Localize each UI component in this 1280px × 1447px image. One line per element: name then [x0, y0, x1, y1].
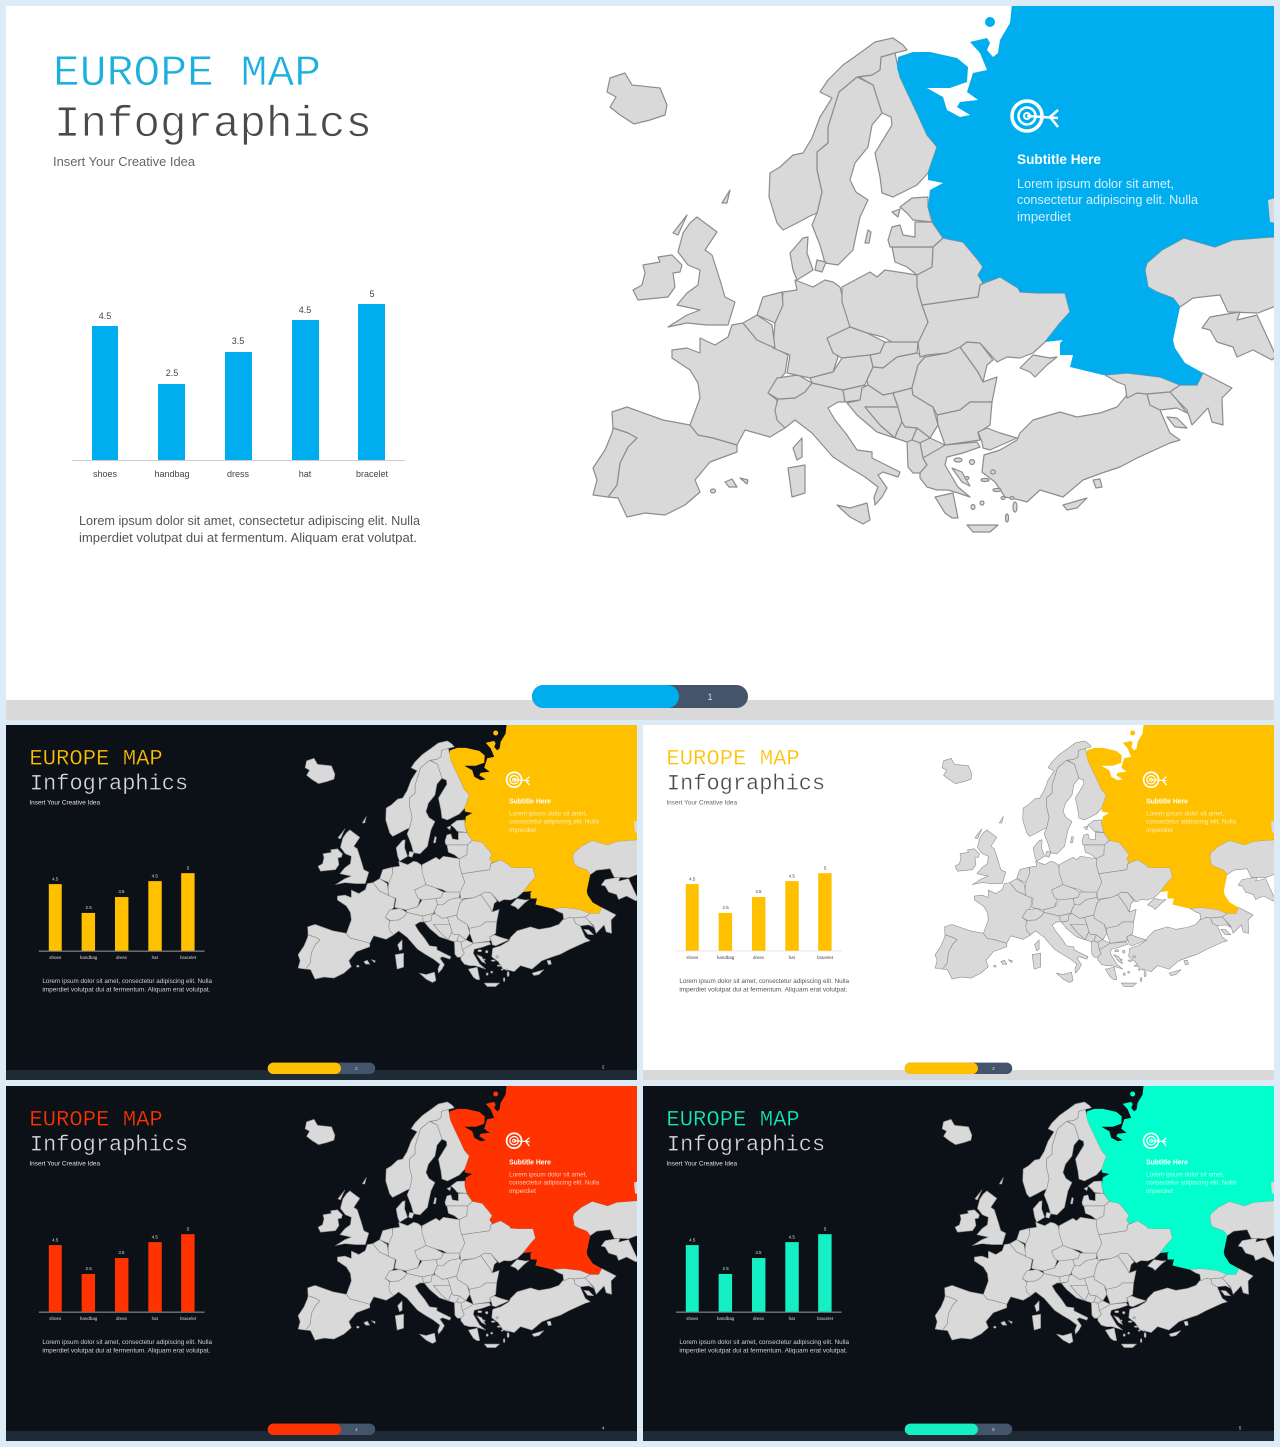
footer band and pager: 5: [992, 1427, 995, 1432]
title: Insert Your Creative Idea: [666, 1161, 737, 1168]
bar chart: 3.5: [118, 1250, 125, 1255]
callout text: Subtitle Here: [1146, 1160, 1188, 1167]
bar chart: 2.5: [722, 1266, 729, 1271]
bar chart: 4.5: [689, 877, 696, 882]
callout text: imperdiet: [1146, 1188, 1173, 1195]
footer band and pager: [6, 1424, 637, 1441]
bar chart: hat: [789, 1316, 796, 1321]
callout text: consectetur adipiscing elit. Nulla: [509, 818, 600, 825]
bar chart: bracelet: [356, 469, 389, 479]
callout text: consectetur adipiscing elit. Nulla: [509, 1179, 600, 1186]
callout text: Subtitle Here: [1017, 151, 1101, 167]
bar chart: 5: [187, 866, 190, 871]
description text: imperdiet volutpat dui at fermentum. Aliquam erat volutpat.: [679, 987, 848, 993]
bar chart: 2.5: [85, 905, 92, 910]
slide 4: red on dark: [6, 1086, 637, 1441]
bar chart: handbag: [717, 1316, 735, 1321]
bar chart: 3.5: [232, 336, 244, 346]
callout text: [1146, 1160, 1237, 1195]
title: [29, 1107, 188, 1168]
slide 3: yellow on white: [643, 725, 1274, 1080]
footer band and pager: 2: [602, 1065, 605, 1070]
bar chart: bracelet: [180, 955, 197, 960]
footer band and pager: [643, 1424, 1274, 1441]
bar chart: bracelet: [817, 955, 834, 960]
bar chart: shoes: [93, 469, 118, 479]
description text: Lorem ipsum dolor sit amet, consectetur adipiscing elit. Nulla: [42, 1339, 212, 1346]
icon: target with arrow: [507, 1133, 530, 1148]
footer band and pager: [6, 685, 1274, 720]
callout text: [1146, 799, 1237, 834]
title: Infographics: [30, 772, 188, 797]
callout text: imperdiet: [1017, 209, 1071, 224]
bar chart: 4.5: [52, 877, 59, 882]
title: Insert Your Creative Idea: [29, 1161, 100, 1168]
bar chart: 4.5: [789, 874, 795, 879]
title: Infographics: [667, 1133, 825, 1158]
slide 2: yellow on dark: [6, 725, 637, 1080]
bar chart: dress: [753, 955, 765, 960]
bar chart: handbag: [717, 955, 735, 960]
bar chart: [72, 289, 405, 479]
title: Insert Your Creative Idea: [53, 154, 196, 169]
title: [53, 49, 372, 169]
bar chart: dress: [116, 955, 128, 960]
icon: target with arrow: [1144, 772, 1167, 787]
europe map: [298, 1085, 638, 1348]
footer band and pager: 3: [992, 1066, 995, 1071]
bar chart: dress: [116, 1316, 128, 1321]
bar chart: 4.5: [152, 874, 158, 879]
icon: target with arrow: [1012, 101, 1058, 131]
description text: imperdiet volutpat dui at fermentum. Aliquam erat volutpat.: [679, 1348, 848, 1354]
bar chart: bracelet: [180, 1316, 197, 1321]
title: Infographics: [30, 1133, 188, 1158]
callout text: imperdiet: [1146, 827, 1173, 834]
bar chart: dress: [227, 469, 250, 479]
footer band and pager: [6, 1063, 637, 1080]
bar chart: handbag: [154, 469, 190, 479]
description text: imperdiet volutpat dui at fermentum. Aliquam erat volutpat.: [42, 987, 211, 993]
bar chart: shoes: [686, 955, 699, 960]
bar chart: 4.5: [689, 1238, 696, 1243]
bar chart: handbag: [80, 1316, 98, 1321]
callout text: [509, 1160, 600, 1195]
bar chart: dress: [753, 1316, 765, 1321]
europe map: [593, 4, 1276, 532]
description text: [42, 1339, 212, 1354]
description text: [679, 1339, 849, 1354]
title: EUROPE MAP: [53, 49, 321, 99]
description text: Lorem ipsum dolor sit amet, consectetur adipiscing elit. Nulla: [679, 1339, 849, 1346]
title: EUROPE MAP: [666, 746, 800, 771]
description text: Lorem ipsum dolor sit amet, consectetur adipiscing elit. Nulla: [679, 978, 849, 985]
europe map: [935, 724, 1275, 987]
bar chart: shoes: [686, 1316, 699, 1321]
bar chart: 4.5: [789, 1235, 795, 1240]
footer band and pager: 4: [355, 1427, 358, 1432]
callout text: Lorem ipsum dolor sit amet,: [1146, 1171, 1224, 1178]
description text: Lorem ipsum dolor sit amet, consectetur adipiscing elit. Nulla: [42, 978, 212, 985]
bar chart: handbag: [80, 955, 98, 960]
callout text: Subtitle Here: [509, 799, 551, 806]
description text: [79, 513, 421, 545]
footer band and pager: [643, 1063, 1274, 1080]
bar chart: bracelet: [817, 1316, 834, 1321]
bar chart: [676, 866, 842, 960]
bar chart: 5: [369, 289, 375, 299]
bar chart: shoes: [49, 955, 62, 960]
callout text: Subtitle Here: [1146, 799, 1188, 806]
bar chart: 5: [187, 1227, 190, 1232]
callout text: consectetur adipiscing elit. Nulla: [1146, 818, 1237, 825]
slide 5: teal on dark: [643, 1086, 1274, 1441]
footer band and pager: 2: [355, 1066, 358, 1071]
callout text: [509, 799, 600, 834]
callout text: Lorem ipsum dolor sit amet,: [509, 810, 587, 817]
bar chart: 4.5: [52, 1238, 59, 1243]
europe map: [935, 1085, 1275, 1348]
title: Insert Your Creative Idea: [29, 800, 100, 807]
bar chart: 4.5: [99, 311, 111, 321]
bar chart: 3.5: [755, 1250, 762, 1255]
callout text: Lorem ipsum dolor sit amet,: [1017, 176, 1174, 191]
bar chart: 3.5: [755, 889, 762, 894]
footer band and pager: 4: [602, 1426, 605, 1431]
footer band and pager: 5: [1239, 1426, 1242, 1431]
bar chart: 2.5: [85, 1266, 92, 1271]
bar chart: 5: [824, 1227, 827, 1232]
bar chart: [39, 866, 205, 960]
description text: [679, 978, 849, 993]
callout text: Lorem ipsum dolor sit amet,: [1146, 810, 1224, 817]
bar chart: 5: [824, 866, 827, 871]
bar chart: [39, 1227, 205, 1321]
callout text: consectetur adipiscing elit. Nulla: [1017, 192, 1199, 207]
bar chart: hat: [152, 955, 159, 960]
slide 1: blue on white: [6, 6, 1274, 720]
description text: imperdiet volutpat dui at fermentum. Aliquam erat volutpat.: [79, 530, 417, 545]
bar chart: 2.5: [166, 368, 178, 378]
description text: [42, 978, 212, 993]
bar chart: shoes: [49, 1316, 62, 1321]
title: EUROPE MAP: [29, 746, 163, 771]
bar chart: 2.5: [722, 905, 729, 910]
icon: target with arrow: [1144, 1133, 1167, 1148]
title: Infographics: [54, 100, 372, 150]
callout text: Lorem ipsum dolor sit amet,: [509, 1171, 587, 1178]
callout text: imperdiet: [509, 827, 536, 834]
title: [29, 746, 188, 807]
title: EUROPE MAP: [29, 1107, 163, 1132]
bar chart: 4.5: [299, 305, 311, 315]
footer band and pager: 1: [707, 692, 713, 702]
callout text: [1017, 151, 1199, 224]
bar chart: hat: [299, 469, 312, 479]
bar chart: hat: [152, 1316, 159, 1321]
bar chart: 4.5: [152, 1235, 158, 1240]
description text: Lorem ipsum dolor sit amet, consectetur adipiscing elit. Nulla: [79, 513, 421, 528]
title: EUROPE MAP: [666, 1107, 800, 1132]
bar chart: 3.5: [118, 889, 125, 894]
bar chart: [676, 1227, 842, 1321]
bar chart: hat: [789, 955, 796, 960]
title: Infographics: [667, 772, 825, 797]
title: [666, 1107, 825, 1168]
callout text: Subtitle Here: [509, 1160, 551, 1167]
title: Insert Your Creative Idea: [666, 800, 737, 807]
title: [666, 746, 825, 807]
callout text: consectetur adipiscing elit. Nulla: [1146, 1179, 1237, 1186]
callout text: imperdiet: [509, 1188, 536, 1195]
description text: imperdiet volutpat dui at fermentum. Aliquam erat volutpat.: [42, 1348, 211, 1354]
europe map: [298, 724, 638, 987]
icon: target with arrow: [507, 772, 530, 787]
